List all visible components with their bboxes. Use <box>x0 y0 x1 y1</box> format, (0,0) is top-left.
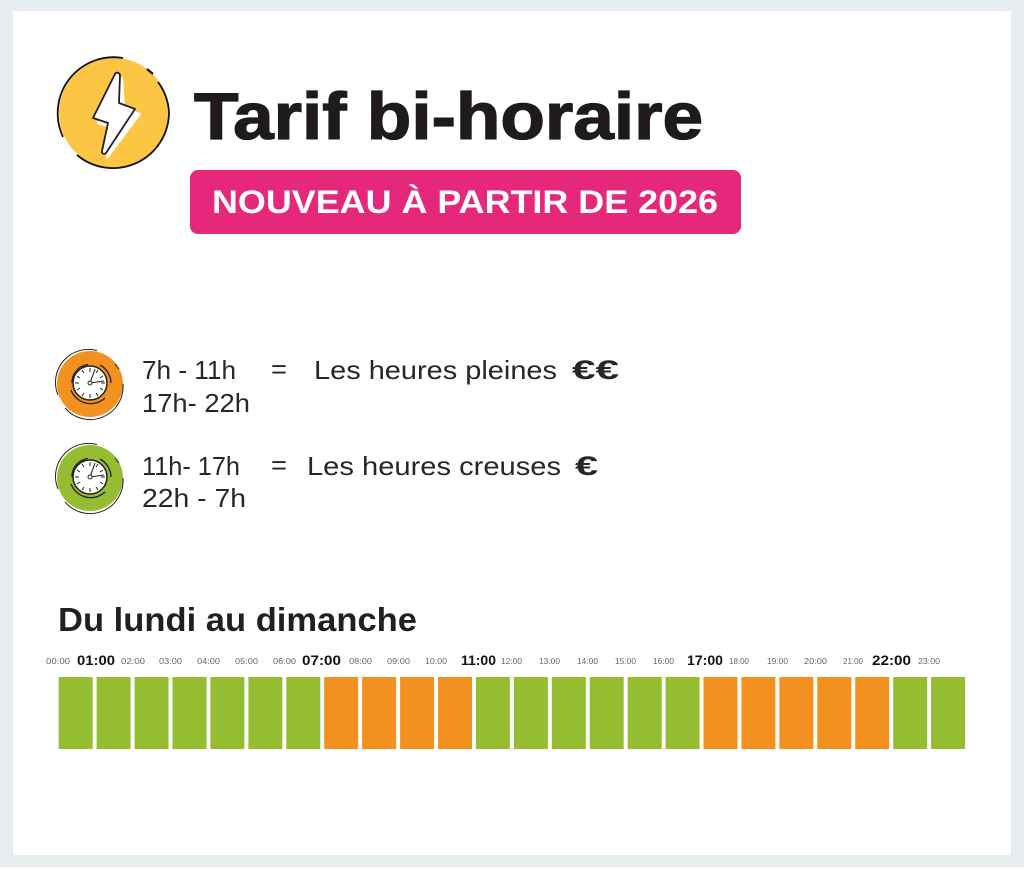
legend: peak hours text: €€ <box>572 355 619 385</box>
hour labels: 00:00 <box>46 657 71 666</box>
icon: orange clock <box>55 349 123 420</box>
legend: off-peak hours text: 11h- 17h <box>142 451 240 481</box>
hour labels: 22:00 <box>872 653 911 668</box>
legend: off-peak hours text: Les heures creuses <box>307 451 561 481</box>
hour labels: 16:00 <box>653 657 675 666</box>
hour labels: 12:00 <box>501 657 523 666</box>
legend: peak hours text <box>142 354 619 418</box>
hour labels: 01:00 <box>77 653 115 668</box>
hour labels: 11:00 <box>461 653 496 668</box>
hour labels <box>46 653 941 668</box>
icon: lightning bolt <box>58 57 169 168</box>
hour labels: 09:00 <box>387 657 411 666</box>
hour labels: 07:00 <box>302 653 341 668</box>
hour labels: 06:00 <box>273 657 297 666</box>
legend: peak hours text: 17h- 22h <box>142 388 250 418</box>
hour labels: 18:00 <box>729 657 750 666</box>
title: Tarif bi-horaire <box>194 79 703 153</box>
legend: peak hours text: Les heures pleines <box>314 355 557 385</box>
icon: green clock <box>55 443 123 514</box>
hour labels: 10:00 <box>425 657 448 666</box>
hour labels: 20:00 <box>804 657 828 666</box>
hour labels: 21:00 <box>843 657 864 666</box>
hour labels: 17:00 <box>687 653 723 668</box>
legend: off-peak hours text: 22h - 7h <box>142 483 246 513</box>
hour labels: 08:00 <box>349 657 373 666</box>
legend: peak hours text: 7h - 11h <box>142 355 236 385</box>
bar chart: 24-hour tariff timeline <box>59 677 965 749</box>
legend: peak hours text: = <box>271 354 287 384</box>
hour labels: 14:00 <box>577 657 599 666</box>
hour labels: 04:00 <box>197 657 221 666</box>
hour labels: 19:00 <box>767 657 789 666</box>
hour labels: 02:00 <box>121 657 146 666</box>
legend: off-peak hours text: = <box>271 450 287 480</box>
hour labels: 13:00 <box>539 657 561 666</box>
hour labels: 15:00 <box>615 657 637 666</box>
hour labels: 23:00 <box>918 657 941 666</box>
hour labels: 03:00 <box>159 657 183 666</box>
heading: days: Du lundi au dimanche <box>58 601 417 638</box>
legend: off-peak hours text: € <box>575 451 598 481</box>
badge: nouveau a partir de 2026: NOUVEAU À PARTIR DE 2026 <box>212 184 718 220</box>
hour labels: 05:00 <box>235 657 259 666</box>
badge: nouveau a partir de 2026 <box>190 170 741 234</box>
legend: off-peak hours text <box>142 450 598 513</box>
